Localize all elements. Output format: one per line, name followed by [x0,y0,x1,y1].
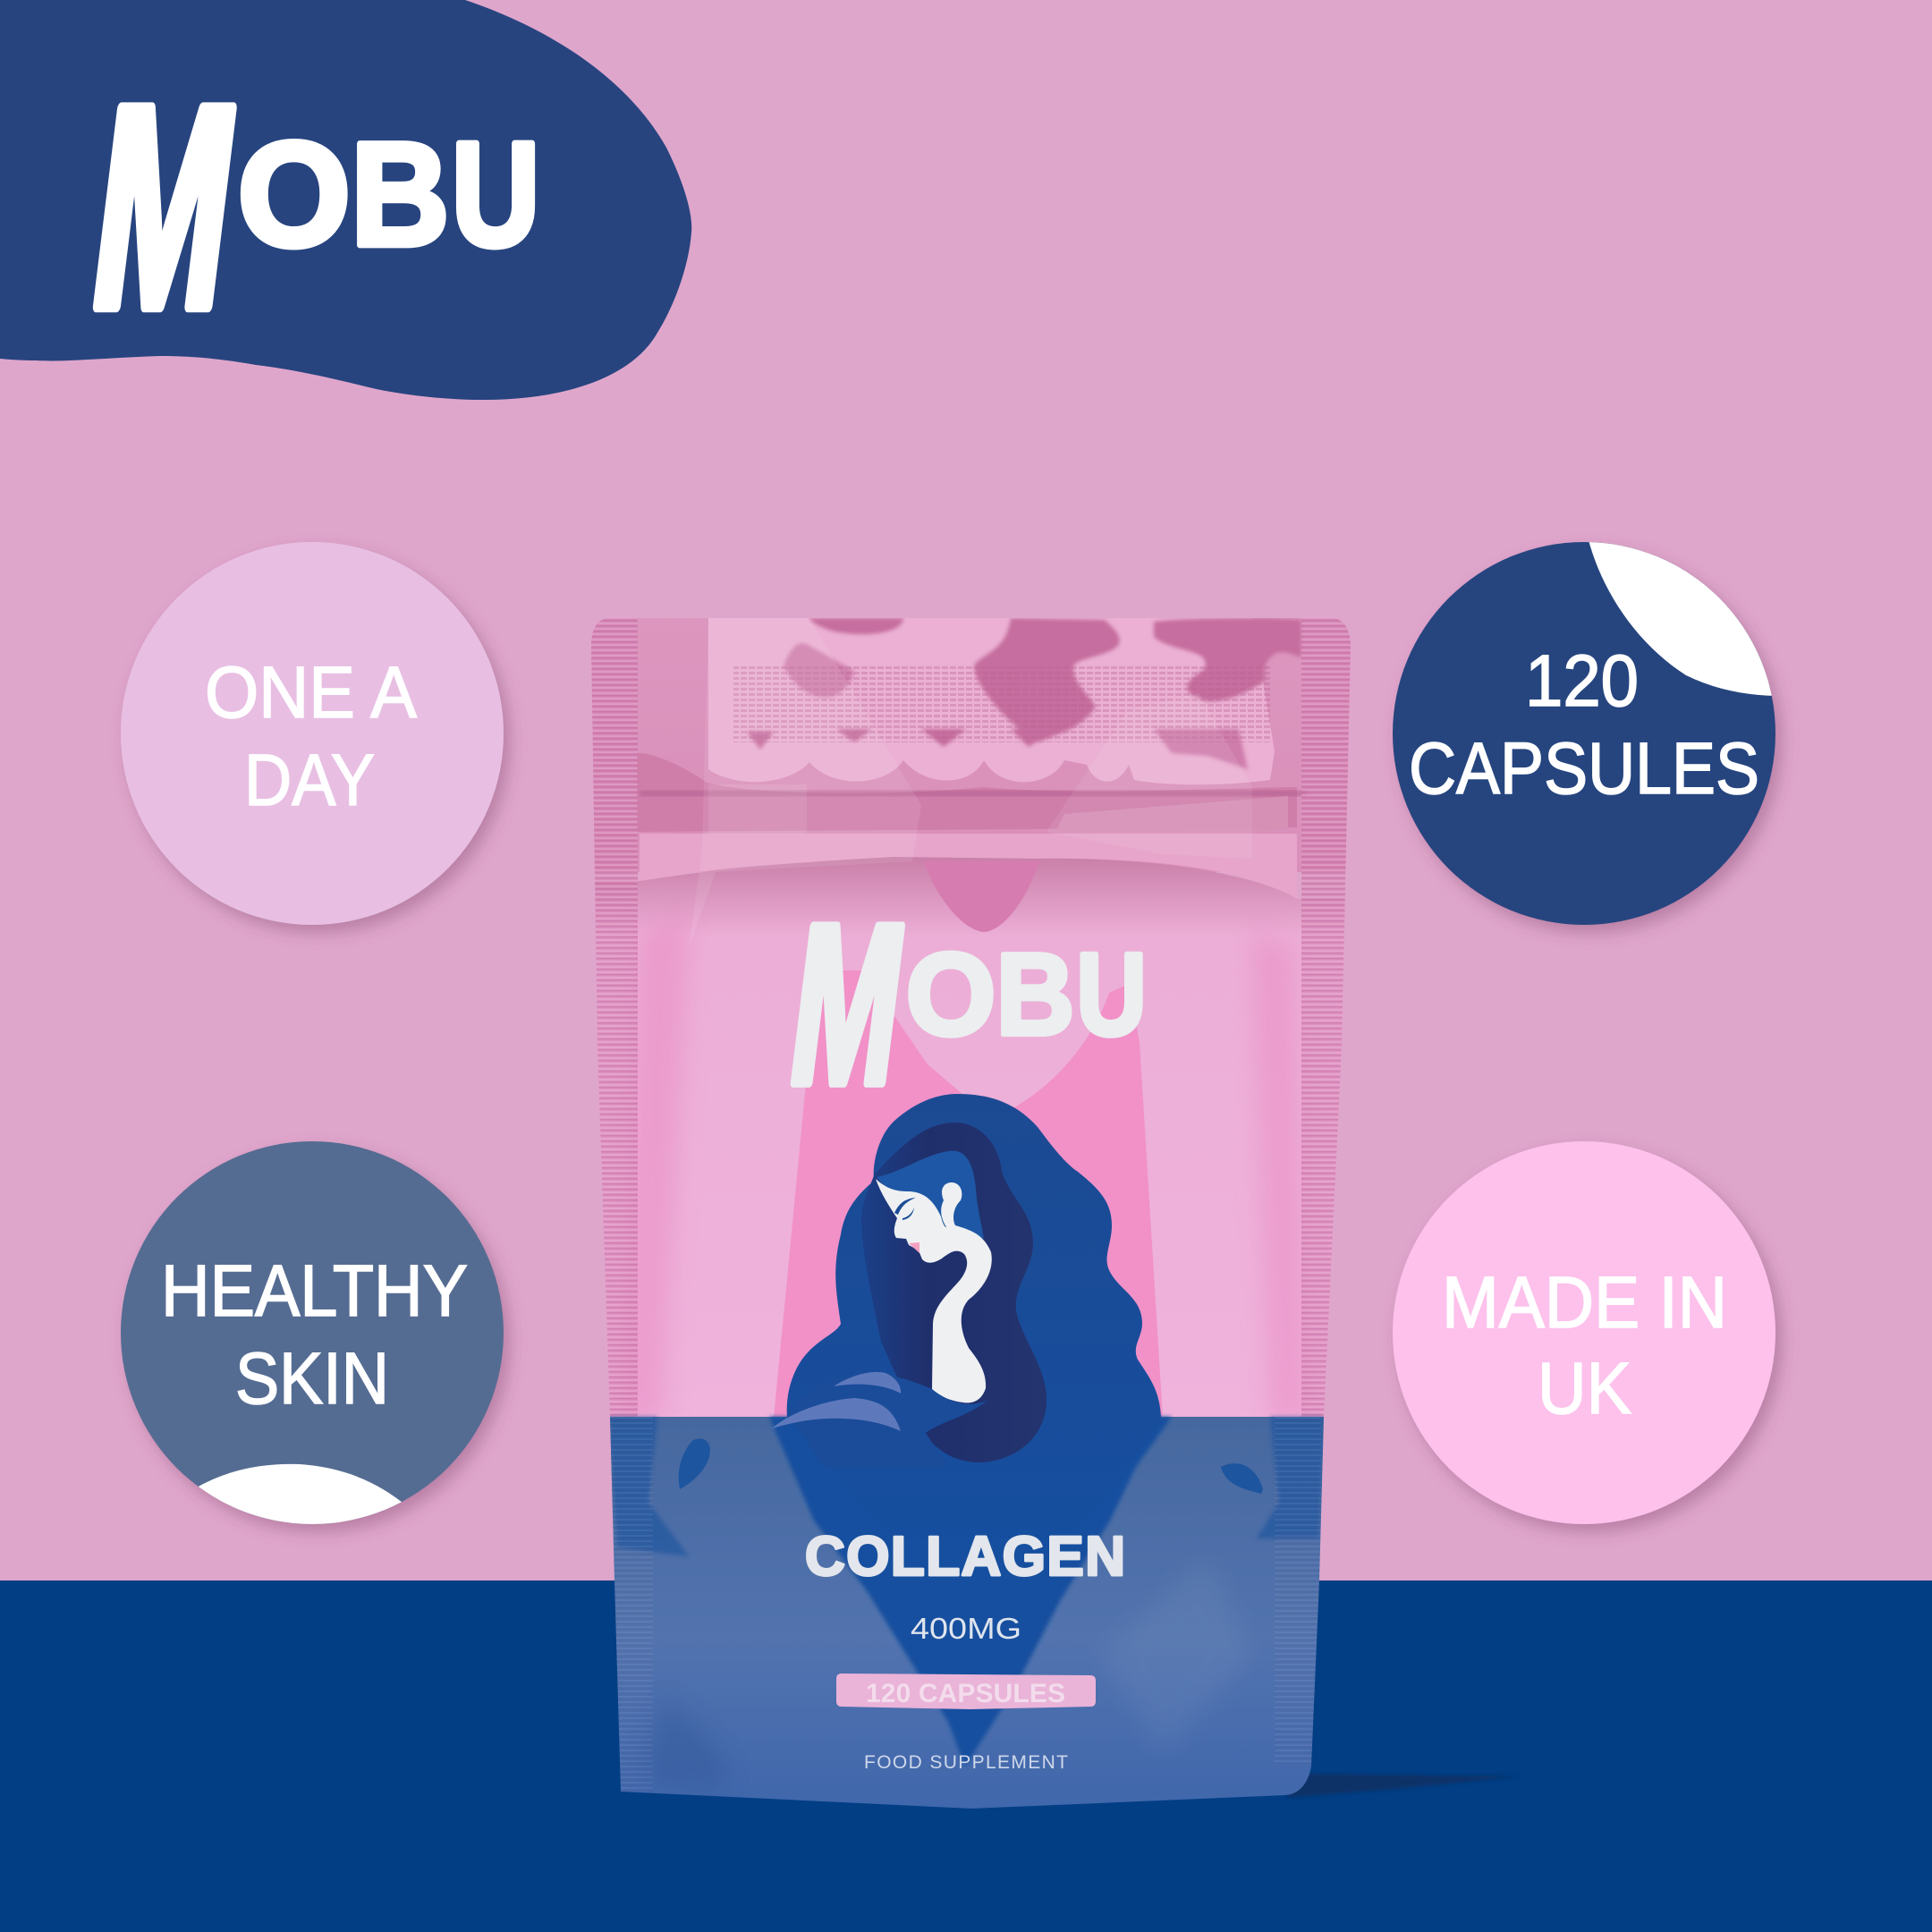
bag cast shadow [1285,1774,1521,1798]
dark reflection patches [747,618,1301,769]
badge: one a day: ONE A [205,652,417,733]
hair mid layer [877,1151,984,1239]
hair outer [787,1094,1161,1538]
collagen label: COLLAGEN [805,1526,1125,1588]
pouch logo: MOBU [779,877,1147,1131]
arm highlights [834,1372,901,1394]
ribbed fold texture [733,666,1270,742]
badge: healthy skin: HEALTHY [161,1250,468,1332]
badge: 120 capsules: CAPSULES [1409,728,1759,809]
white cap accent [199,1463,402,1524]
hair dark layer [861,1123,1046,1462]
pouch blue section [610,1417,1324,1809]
badge: one a day [121,542,504,925]
badge: made in uk [1393,1141,1775,1524]
bright pink trapezoid [774,970,1163,1418]
capsule pill [836,1674,1096,1709]
dark seal band [637,753,1297,832]
capsule pill: 120 CAPSULES [866,1679,1065,1708]
badge: one a day: DAY [244,740,375,821]
front arm [789,1373,988,1467]
pouch pink body [595,857,1351,1422]
zip light band [640,834,1297,872]
logo: MOBU: B [351,112,449,276]
rib texture seams [591,618,638,1417]
product pouch [581,613,1360,1819]
pouch logo: MOBU: O [906,930,996,1060]
badge: 120 capsules [1393,537,1789,925]
fold creases [649,1716,710,1776]
woman illustration [772,1094,1161,1538]
blue seams [608,1417,689,1556]
eyebrow and eye [894,1198,916,1220]
lips [909,1242,919,1253]
badge: made in uk: UK [1538,1348,1631,1429]
logo: MOBU: U [452,113,539,277]
translucent giant M stems [694,633,921,907]
logo: MOBU: M [79,48,251,368]
food supplement label: FOOD SUPPLEMENT [864,1752,1068,1773]
floor [0,1580,1932,1932]
face and neck [876,1179,992,1402]
pouch logo: MOBU: M [779,877,917,1131]
side pink gradient [629,922,691,1417]
white crescent accent [1589,542,1772,696]
logo: MOBU: O [238,111,351,276]
central tongue [924,861,1039,932]
pouch logo: MOBU: B [996,929,1074,1059]
badge: 120 capsules: 120 [1525,640,1639,722]
brand blob with logo [0,0,691,400]
logo: MOBU [79,48,539,368]
deep blue V [769,1417,1172,1767]
badge: made in uk: MADE IN [1442,1262,1727,1343]
light mirrored logo patches [708,618,1275,784]
pouch top section [581,613,1360,872]
badge: healthy skin [121,1141,504,1538]
badge: healthy skin: SKIN [235,1338,389,1419]
pouch logo: MOBU: U [1076,930,1147,1060]
dose label: 400MG [911,1612,1021,1645]
